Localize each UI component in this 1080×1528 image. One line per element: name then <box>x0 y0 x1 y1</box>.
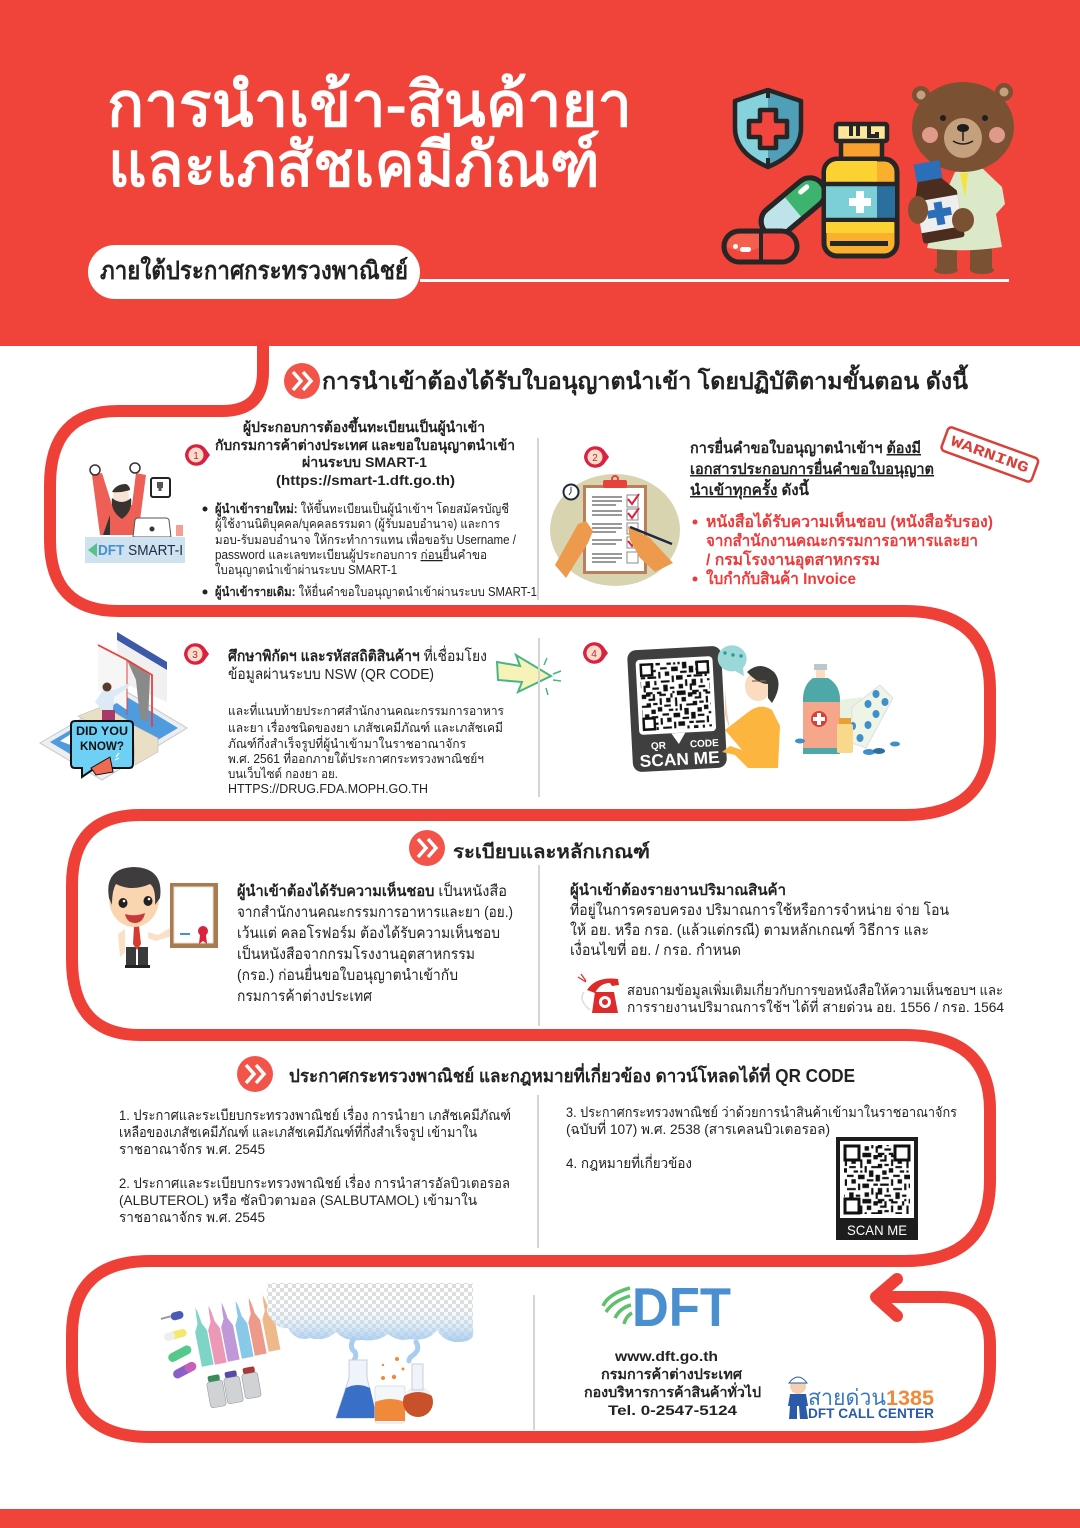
text: hotline enquiries <box>627 981 1004 1015</box>
text: quantity reporting <box>570 881 949 959</box>
section heading: import permit: การนำเข้าต้องได้รับใบอนุญาตนำเข้า โดยปฏิบัติตามขั้นตอน ดังนี้ <box>322 364 969 396</box>
text: application documents: นำเข้าทุกครั้ง ดังนี้ <box>690 478 810 500</box>
text: registration bullets: ใบอนุญาตนำเข้าผ่านระบบ SMART-1 <box>215 563 397 578</box>
step marker 3 <box>184 643 209 665</box>
icon: shield <box>735 88 801 168</box>
text: laws 1 and 2: (ALBUTEROL) หรือ ซัลบิวตามอล (SALBUTAMOL) เข้ามาใน <box>119 1192 477 1208</box>
text: annex details: และยา เรื่องชนิดของยา เภสัชเคมีภัณฑ์ และเภสัชเคมี <box>228 719 503 735</box>
text: registration bullets: มอบ-รับมอบอำนาจ ให้กระทำการแทน เพื่อขอรับ Username / <box>215 531 516 547</box>
text: quantity reporting: ที่อยู่ในการครอบครอง ปริมาณการใช้หรือการจำหน่าย จ่าย โอน <box>570 899 949 919</box>
text: annex details <box>228 702 504 796</box>
text: application documents: การยื่นคำขอใบอนุญาตนำเข้าฯ ต้องมี <box>690 437 921 458</box>
icon: scan me QR card <box>627 646 727 772</box>
icon: man pointing <box>718 645 780 768</box>
text: laws 1 and 2 <box>119 1106 511 1225</box>
text: registration heading: (https://smart-1.dft.go.th) <box>276 472 455 488</box>
text: annex details: ภัณฑ์กึ่งสำเร็จรูปที่ผู้นำเข้ามาในราชอาณาจักร <box>228 735 466 752</box>
icon: scan me QR card: QR <box>651 741 667 752</box>
text: annex details: และที่แนบท้ายประกาศสำนักงานคณะกรรมการอาหาร <box>228 702 504 718</box>
text: registration heading: ผ่านระบบ SMART-1 <box>302 454 427 470</box>
icon: scan me QR card: SCAN ME <box>639 748 720 771</box>
QR code: scan me <box>836 1137 918 1240</box>
text: application documents: เอกสารประกอบการยื่นคำขอใบอนุญาต <box>690 458 934 479</box>
step marker 2: 2 <box>592 453 598 464</box>
text: laws 3 and 4: (ฉบับที่ 107) พ.ศ. 2538 (สารเคลนบิวเตอรอล) <box>566 1120 830 1137</box>
icon: man with laptop and DFT SMART-1 banner: DFT SMART-I <box>98 542 183 559</box>
subtitle pill <box>88 245 420 299</box>
text: registration bullets: password และเลขทะเบียนผู้ประกอบการ ก่อนยื่นคำขอ <box>215 546 487 563</box>
section heading: import permit <box>284 363 969 399</box>
arrow head of flow line <box>876 1279 897 1316</box>
stamp: warning: WARNING <box>948 433 1031 477</box>
text: approval requirement: จากสำนักงานคณะกรรมการอาหารและยา (อย.) <box>237 904 513 921</box>
section heading: related laws: ประกาศกระทรวงพาณิชย์ และกฎหมายที่เกี่ยวข้อง ดาวน์โหลดได้ที่ QR CODE <box>289 1063 855 1086</box>
logo: DFT: DFT <box>632 1276 731 1338</box>
illustration: ampoules, vials and capsules <box>160 1294 280 1408</box>
icon: certificate <box>170 883 218 948</box>
panel: related laws <box>119 1056 957 1240</box>
subtitle rule <box>420 279 1009 282</box>
icon: arrow pointing to QR <box>497 655 561 695</box>
text: laws 1 and 2: เหลือของเภสัชเคมีภัณฑ์ และเภสัชเคมีภัณฑ์ที่กึ่งสำเร็จรูป เข้ามาใน <box>119 1123 477 1141</box>
icon: hotline logo: 1385 <box>886 1387 934 1410</box>
text: registration bullets: ผู้นำเข้ารายเดิม: ให้ยื่นคำขอใบอนุญาตนำเข้าผ่านระบบ SMART-1 <box>215 583 537 600</box>
icon: man with laptop and DFT SMART-1 banner <box>85 463 185 563</box>
header band <box>0 0 1080 346</box>
text: contact details: Tel. 0-2547-5124 <box>608 1402 737 1418</box>
text: registration bullets <box>202 499 537 600</box>
step marker 3: 3 <box>192 650 198 661</box>
icon: businessman with certificate <box>108 867 172 968</box>
icon: red telephone <box>578 974 619 1013</box>
text: contact details: กองบริหารการค้าสินค้าทั่วไป <box>584 1382 761 1400</box>
panel: regulations <box>108 830 1004 1015</box>
icon: hotline logo: DFT CALL CENTER <box>808 1405 934 1421</box>
text: laws 1 and 2: ราชอาณาจักร พ.ศ. 2545 <box>119 1141 265 1157</box>
section heading: regulations: ระเบียบและหลักเกณฑ์ <box>453 841 650 863</box>
icon: did you know tablet: DID YOU <box>76 724 128 738</box>
text: annex details: HTTPS://DRUG.FDA.MOPH.GO.TH <box>228 782 428 796</box>
text: red required documents: จากสำนักงานคณะกรรมการอาหารและยา <box>706 532 978 550</box>
icon: hotline logo <box>788 1377 934 1421</box>
text: contact details: www.dft.go.th <box>614 1348 718 1364</box>
icon: chevrons <box>409 830 445 866</box>
panel: step 1 <box>85 416 537 600</box>
text: tariff code <box>228 645 487 683</box>
step marker 4 <box>583 642 608 664</box>
icon: hotline logo: สายด่วน <box>808 1385 886 1410</box>
step marker 4: 4 <box>591 649 597 660</box>
bottom band <box>0 1509 1080 1528</box>
step marker 1 <box>185 444 210 466</box>
text: registration bullets: ผู้นำเข้ารายใหม่: ให้ขึ้นทะเบียนเป็นผู้นำเข้าฯ โดยสมัครบัญชี <box>215 499 509 517</box>
text: laws 3 and 4: 4. กฎหมายที่เกี่ยวข้อง <box>566 1154 692 1171</box>
text: tariff code: ข้อมูลผ่านระบบ NSW (QR CODE) <box>228 666 434 683</box>
text: quantity reporting: ผู้นำเข้าต้องรายงานปริมาณสินค้า <box>570 881 786 900</box>
text: approval requirement: เว้นแต่ คลอโรฟอร์ม ต้องได้รับความเห็นชอบ <box>237 923 500 942</box>
icon: medicines <box>795 664 900 755</box>
icon: chevrons <box>284 363 320 399</box>
section heading: regulations <box>409 830 650 866</box>
panel: step 4 <box>583 642 900 772</box>
QR code: scan me: SCAN ME <box>847 1222 907 1238</box>
text: approval requirement: เป็นหนังสือจากกรมโรงงานอุตสาหกรรม <box>237 944 475 964</box>
subtitle pill: ภายใต้ประกาศกระทรวงพาณิชย์ <box>100 255 408 285</box>
text: approval requirement: ผู้นำเข้าต้องได้รับความเห็นชอบ เป็นหนังสือ <box>237 881 507 901</box>
text: registration heading: กับกรมการค้าต่างประเทศ และขอใบอนุญาตนำเข้า <box>215 436 515 454</box>
flow line connecting sections <box>50 340 990 1437</box>
text: red required documents <box>692 510 993 588</box>
text: quantity reporting: เงื่อนไขที่ อย. / กรอ. กำหนด <box>570 939 741 959</box>
text: red required documents: / กรมโรงงานอุตสาหกรรม <box>706 549 880 570</box>
text: hotline enquiries: สอบถามข้อมูลเพิ่มเติมเกี่ยวกับการขอหนังสือให้ความเห็นชอบฯ และ <box>627 981 1003 999</box>
text: laws 3 and 4 <box>566 1104 957 1171</box>
text: approval requirement <box>237 881 513 1005</box>
text: hotline enquiries: การรายงานปริมาณการใช้ฯ ได้ที่ สายด่วน อย. 1556 / กรอ. 1564 <box>627 998 1004 1015</box>
icon: chevrons <box>237 1056 273 1092</box>
text: laws 1 and 2: 1. ประกาศและระเบียบกระทรวงพาณิชย์ เรื่อง การนำยา เภสัชเคมีภัณฑ์ <box>119 1106 511 1123</box>
text: annex details: บนเว็บไซต์ กองยา อย. <box>228 766 338 781</box>
text: application documents <box>690 437 934 500</box>
text: registration bullets: ผู้ใช้งานนิติบุคคล/บุคคลธรรมดา (ผู้รับมอบอำนาจ) และการ <box>215 517 500 532</box>
text: red required documents: ใบกำกับสินค้า Invoice <box>706 569 856 588</box>
stamp: warning <box>940 426 1039 483</box>
title <box>107 71 632 200</box>
text: approval requirement: (กรอ.) ก่อนยื่นขอใบอนุญาตนำเข้ากับ <box>237 964 458 985</box>
step marker 1: 1 <box>193 451 199 462</box>
title: การนำเข้า-สินค้ายา <box>107 71 632 140</box>
text: red required documents: หนังสือได้รับความเห็นชอบ (หนังสือรับรอง) <box>706 510 993 531</box>
text: laws 1 and 2: 2. ประกาศและระเบียบกระทรวงพาณิชย์ เรื่อง การนำสารอัลบิวเตอรอล <box>119 1174 510 1191</box>
section heading: related laws <box>237 1056 855 1092</box>
text: quantity reporting: ให้ อย. หรือ กรอ. (แล้วแต่กรณี) ตามหลักเกณฑ์ วิธีการ และ <box>570 921 929 939</box>
title: และเภสัชเคมีภัณฑ์ <box>108 131 600 200</box>
text: annex details: พ.ศ. 2561 ที่ออกภายใต้ประกาศกระทรวงพาณิชย์ฯ <box>228 750 484 766</box>
text: tariff code: ศึกษาพิกัดฯ และรหัสสถิติสินค้าฯ ที่เชื่อมโยง <box>228 645 487 665</box>
text: registration heading <box>215 416 515 488</box>
illustration: flasks with vapour cloud <box>267 1283 473 1423</box>
text: laws 3 and 4: 3. ประกาศกระทรวงพาณิชย์ ว่าด้วยการนำสินค้าเข้ามาในราชอาณาจักร <box>566 1104 957 1120</box>
icon: bear pharmacist <box>908 82 1014 274</box>
panel: step 2 <box>550 426 1039 588</box>
icon: pills <box>724 172 831 262</box>
text: contact details: กรมการค้าต่างประเทศ <box>601 1366 743 1382</box>
panel: step 3 <box>40 632 561 796</box>
text: contact details <box>584 1348 761 1418</box>
step marker 2 <box>584 446 609 468</box>
text: laws 1 and 2: ราชอาณาจักร พ.ศ. 2545 <box>119 1209 265 1225</box>
icon: did you know tablet <box>40 632 187 780</box>
icon: did you know tablet: KNOW? <box>80 739 124 753</box>
icon: medicine bottle <box>824 124 897 256</box>
text: registration heading: ผู้ประกอบการต้องขึ้นทะเบียนเป็นผู้นำเข้า <box>243 416 485 436</box>
text: approval requirement: กรมการค้าต่างประเทศ <box>237 988 372 1005</box>
panel: footer <box>160 1276 934 1423</box>
icon: scan me QR card: CODE <box>690 738 719 750</box>
icon: clipboard checklist <box>550 474 680 586</box>
